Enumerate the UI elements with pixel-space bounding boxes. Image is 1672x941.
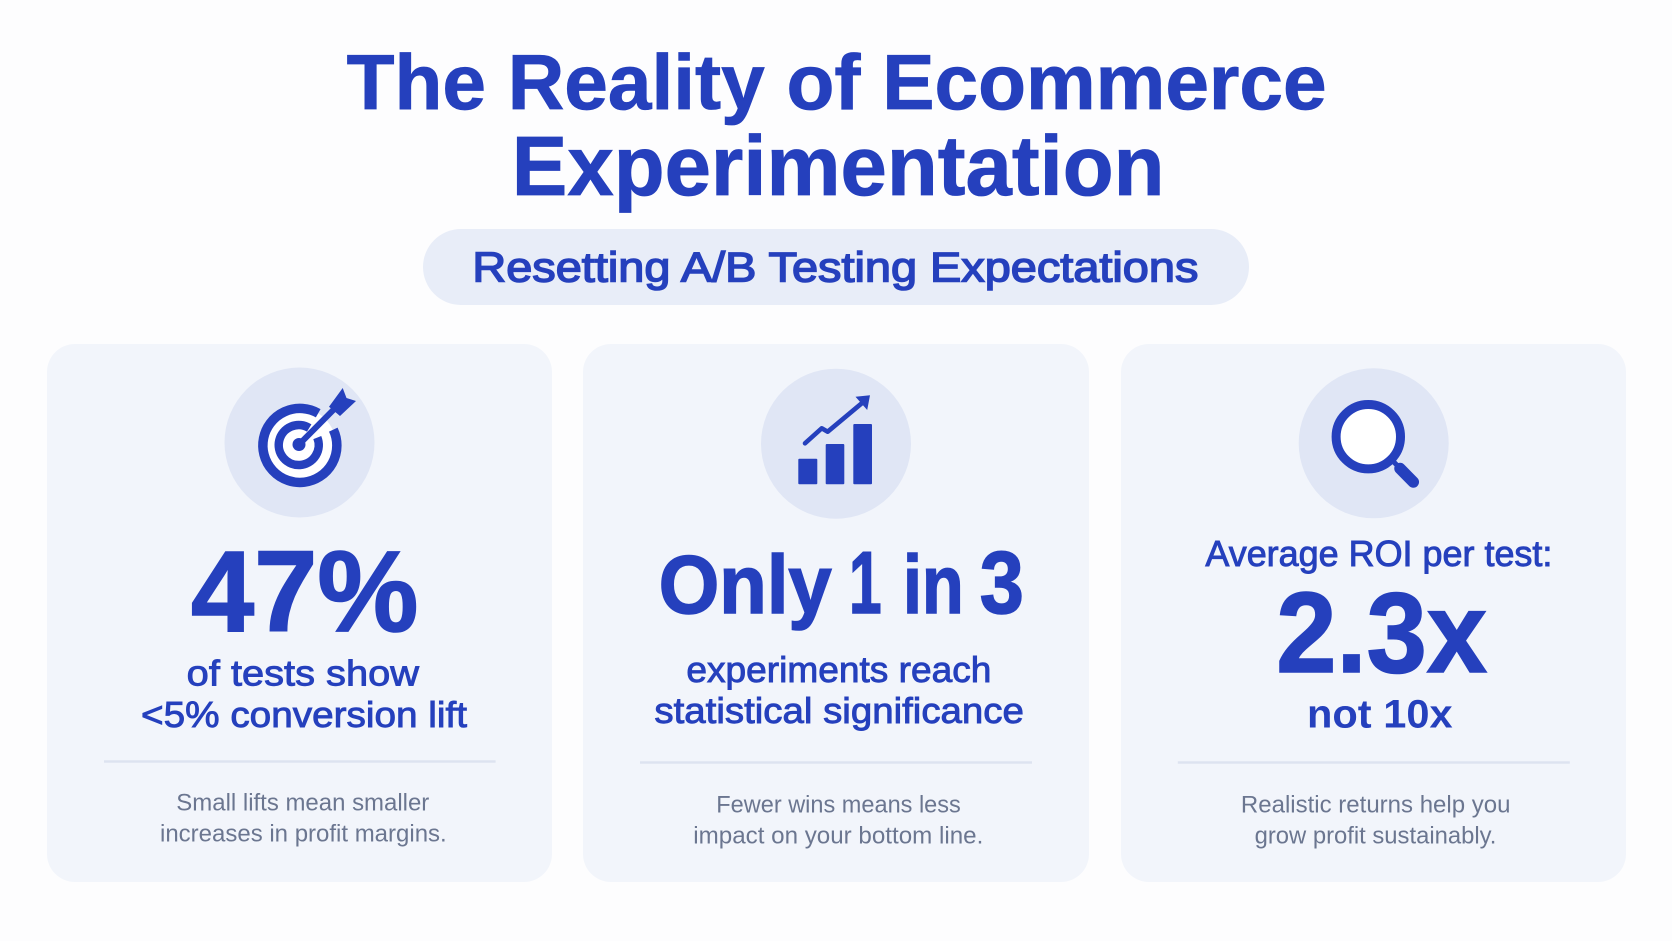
subtitle pill: Resetting A/B Testing Expectations — [472, 244, 1198, 290]
big stat: only 1 in 3: in — [903, 538, 964, 631]
stat description: of tests show — [187, 653, 420, 694]
stat qualifier: not 10x — [1307, 692, 1453, 736]
title: Experimentation — [512, 119, 1164, 213]
supporting note: Realistic returns help you — [1241, 792, 1510, 818]
supporting note: increases in profit margins. — [160, 820, 447, 847]
supporting note: Fewer wins means less — [716, 792, 961, 818]
stat description: statistical significance — [654, 690, 1024, 731]
stat label: Average ROI per test: — [1205, 533, 1552, 574]
supporting note — [693, 792, 983, 850]
big stat: 47%: 47% — [191, 528, 418, 656]
supporting note: impact on your bottom line. — [693, 823, 983, 850]
supporting note: Small lifts mean smaller — [176, 790, 429, 817]
title: The Reality of Ecommerce — [347, 38, 1327, 126]
big stat: only 1 in 3 — [659, 533, 1024, 632]
stat description: <5% conversion lift — [141, 694, 467, 735]
stat description — [141, 653, 467, 735]
panel: average ROI — [1121, 344, 1626, 882]
icon: magnifying glass — [1299, 368, 1449, 518]
icon: bar chart with rising arrow — [761, 369, 911, 519]
big stat: only 1 in 3: Only — [659, 538, 832, 631]
stat description: experiments reach — [686, 649, 991, 690]
big stat: only 1 in 3: 1 — [849, 533, 882, 632]
panel: tests lift — [47, 344, 552, 882]
supporting note: grow profit sustainably. — [1255, 823, 1496, 850]
title — [347, 38, 1327, 213]
big stat: only 1 in 3: 3 — [980, 533, 1024, 632]
supporting note — [1241, 792, 1510, 850]
big stat: 2.3x: 2.3x — [1276, 570, 1487, 697]
panel: statistical significance — [583, 344, 1089, 882]
subtitle pill — [423, 229, 1249, 305]
stat description — [654, 649, 1024, 731]
icon: target with arrow — [224, 368, 374, 518]
supporting note — [160, 790, 447, 847]
